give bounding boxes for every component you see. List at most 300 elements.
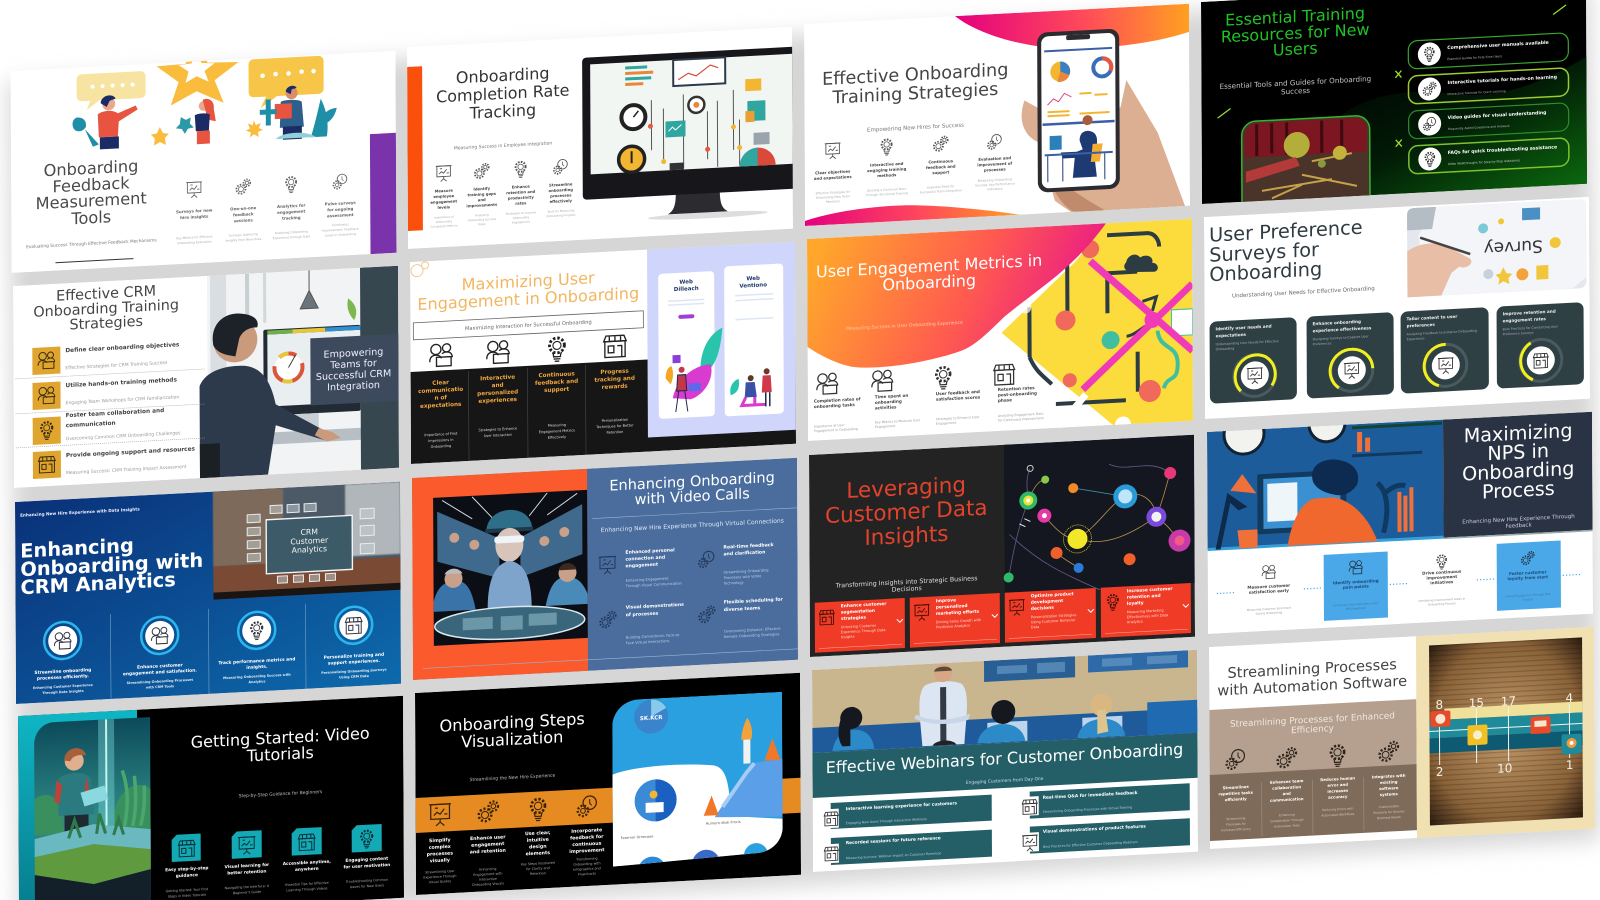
icon row and labels: onboarding (548, 187, 573, 193)
item descriptions: Processes with Video (724, 574, 761, 580)
photo: trainer in a call-centre room (812, 650, 1197, 753)
small kicker line: Enhancing New Hire Experience with Data Insights (20, 506, 140, 518)
icon row and labels: methods (877, 172, 897, 178)
card 2 (1307, 312, 1394, 399)
row texts: Provide ongoing support and resources (66, 446, 196, 459)
descriptions: Engagement (512, 220, 531, 225)
slide 9: Enhancing Onboarding with CRM Analytics (15, 482, 401, 704)
icon row and labels: improvement of (977, 161, 1013, 167)
metric descriptions: Engagement in Onboarding (814, 427, 858, 433)
teal panel (18, 710, 138, 900)
item labels: Enhanced personal (625, 548, 675, 556)
metric labels: User feedback and (936, 389, 980, 396)
metric labels (814, 385, 1037, 414)
card 4: Best Practices for Conducting User (1503, 324, 1558, 331)
slide 12: Maximizing NPS in Onboarding Process (1207, 392, 1593, 634)
slide 13: Getting Started: Video Tutorials (18, 696, 404, 900)
descriptions: Enhancing New Experience with (1333, 601, 1378, 607)
descriptions: Surveys: Gathering (229, 232, 258, 238)
card: manuals (1408, 33, 1568, 69)
heading: Onboarding Training (33, 297, 179, 321)
labels: guidance (176, 872, 198, 879)
item labels (625, 542, 784, 618)
icon row and labels (176, 173, 356, 226)
card 3: Using Customer Behavior (1031, 618, 1076, 624)
timeline numbers: 8 (1435, 698, 1443, 712)
icon row and labels: Identify (473, 186, 490, 192)
heading: Onboarding (44, 156, 138, 180)
column descriptions (33, 668, 387, 696)
descriptions: Insights from New Hires (226, 237, 262, 243)
illustration: desktop monitor with dashboard (582, 47, 798, 225)
icon row and labels: rates (515, 200, 527, 206)
descriptions: Onboarding Progress (546, 213, 576, 218)
descriptions: Essential Skills for (927, 184, 954, 190)
heading: Resources for New (1221, 20, 1370, 46)
row texts: Utilize hands-on training methods (66, 377, 177, 389)
decorative rings (411, 262, 429, 277)
subtitle: Step-by-Step Guidance for Beginners (239, 789, 323, 799)
card: interactive learning: Interactive learning experience for customers (846, 800, 957, 812)
timeline numbers: 1 (1566, 758, 1574, 772)
card 2: personalized (936, 603, 967, 611)
descriptions: Measuring Customer Sentiment (1247, 606, 1291, 612)
descriptions: Using Engagement Through NPS (1505, 592, 1551, 598)
heading: Onboarding (456, 64, 550, 87)
column labels: error and (1327, 782, 1348, 788)
card 4: Measuring Marketing (1127, 608, 1164, 614)
subtitle: Enhancing New Hire Experience Through (1462, 514, 1575, 526)
photo: CRM customer analytics hologram: CRM (300, 527, 318, 537)
item descriptions: Through Visual Communication (625, 581, 682, 588)
icons (1262, 550, 1534, 579)
orange left panel (412, 469, 588, 680)
metric labels: onboarding (875, 399, 902, 405)
item labels: and clarification (723, 549, 765, 557)
column descriptions: Streamlining Onboarding Processes (127, 678, 193, 685)
icon row and labels: and (478, 197, 486, 202)
column labels: Reduces human (1320, 775, 1355, 782)
card 2: Driving Sales Growth with (936, 618, 981, 624)
column descriptions: Through Data Insights (42, 689, 84, 695)
column descriptions: Strategies to Enhance (479, 426, 517, 432)
slide 4: Essential Training Resources for New Users (1201, 0, 1587, 219)
heading: User Preference (1209, 216, 1363, 247)
photo: CRM customer analytics hologram (213, 482, 401, 600)
icon row and labels: productivity (508, 194, 534, 201)
labels: continuous (572, 841, 602, 848)
orange column labels: n of (434, 395, 447, 402)
slide 8: User Preference Surveys for Onboarding (1204, 197, 1590, 419)
column dividers (1262, 777, 1364, 836)
illustration: person at desk with clocks (1207, 400, 1444, 551)
heading: Surveys for (1209, 238, 1319, 267)
subtitle: Engaging Customers from Day One (966, 776, 1044, 786)
subtitle box: Maximizing Interaction for Successful Onboarding (465, 319, 592, 332)
descriptions: Strategies to Improve (506, 210, 536, 216)
black lower band (411, 352, 796, 464)
card 2 (910, 593, 1000, 648)
card 2: Improve (936, 598, 956, 604)
column descriptions: Measuring (548, 423, 566, 428)
descriptions: Onboarding New Team (816, 194, 850, 200)
heading: Streamlining Processes (1227, 656, 1397, 682)
card 4: Analytics (1127, 620, 1143, 624)
heading: Users (1273, 38, 1318, 60)
card: tutorials: Interactive tutorials for hands-on learning (1447, 74, 1557, 86)
line icons (817, 364, 1015, 395)
gradient wave header (807, 223, 1107, 371)
row descriptions: Overcoming Common CRM Onboarding Challenges (66, 430, 181, 442)
subtitle: Streamlining the New Hire Experience (470, 773, 556, 783)
card 4: Effectiveness with Data (1127, 613, 1168, 619)
column labels: repetitive tasks (1218, 790, 1254, 797)
icon row and labels: hire insights (180, 214, 209, 220)
descriptions: Transforming (576, 856, 598, 862)
metric labels: Retention rates (998, 385, 1035, 392)
card: interactive learning: Engaging New Users Through Interactive Webinars (846, 817, 927, 825)
orange column labels: rewards (602, 384, 628, 391)
card 4 (1497, 302, 1584, 389)
card: FAQs: Video Walkthroughs for Step-by-Step Assistance (1448, 158, 1520, 166)
labels: processes (427, 850, 453, 858)
icon tiles (32, 347, 61, 479)
slide 16: Streamlining Processes with Automation Software (1209, 627, 1595, 849)
line icons (430, 334, 626, 368)
labels: visually (430, 857, 450, 864)
descriptions: for Clarity and (526, 866, 550, 871)
column descriptions: Analytics (248, 679, 266, 684)
card 2: Predictive Analytics (936, 624, 970, 629)
orange column labels: Clear (432, 380, 449, 387)
column descriptions: Effectively (548, 435, 566, 440)
heading: Effective CRM (56, 284, 156, 305)
item labels: Real-time feedback (723, 543, 774, 551)
descriptions (430, 208, 576, 229)
row descriptions: Effective Strategies for CRM Training Success (65, 360, 168, 371)
descriptions: Navigating the Interface: A (225, 884, 269, 890)
card 1: segmentation (841, 608, 875, 616)
heading: Tools (70, 207, 111, 228)
column labels: software (1379, 785, 1399, 791)
column descriptions: Impressions in (428, 438, 454, 443)
heading: Customer Data (825, 496, 988, 529)
labels: and retention (470, 848, 506, 856)
labels: elements (526, 850, 550, 857)
icon row and labels: Interactive and (870, 161, 903, 168)
lavender panel with phones: Web (679, 279, 693, 286)
labels: Engaging content (345, 857, 388, 864)
card 1: strategies (841, 615, 866, 622)
heading: with Video Calls (635, 486, 750, 508)
item descriptions: Remote Onboarding Strategies (724, 632, 780, 639)
band icons (429, 796, 596, 826)
card 3: Personalization Strategies (1031, 613, 1076, 619)
column labels: increases (1327, 788, 1349, 794)
callout: Empowering Teams: Successful CRM (316, 368, 391, 383)
icon row and labels: Enhance (512, 184, 530, 190)
card 3: Experience (1407, 336, 1424, 341)
column labels: collaboration (1272, 784, 1301, 791)
beige frame (1416, 627, 1595, 838)
card 1: Onboarding (1216, 346, 1234, 351)
column dividers (111, 604, 306, 699)
metric descriptions: Key Metrics to Measure User (875, 418, 920, 424)
icon row and labels: Evaluation and (978, 155, 1011, 162)
column descriptions: User Interaction (484, 433, 512, 438)
descriptions: Measuring Onboarding (978, 177, 1012, 183)
green gradient background shape (1301, 57, 1587, 199)
card 3: Analyzing Feedback to Enhance Onboarding (1407, 329, 1477, 336)
column descriptions: Importance of First (424, 432, 457, 437)
column labels (1218, 773, 1406, 806)
card 4: loyalty (1127, 600, 1144, 607)
subtitle: Feedback (1505, 522, 1532, 530)
labels: Measure customer (1247, 583, 1290, 590)
icon row and labels: engaging training (867, 166, 907, 173)
metric labels: onboarding tasks (814, 402, 855, 409)
descriptions: Onboarding (436, 219, 452, 224)
column labels: Enhance customer (137, 663, 183, 671)
card: recorded sessions: Measuring Success: Webinar Impact on Customer Retention (846, 851, 941, 860)
column labels: Streamline onboarding (34, 668, 91, 676)
heading: Tutorials (246, 743, 314, 766)
metric labels: post-onboarding (998, 390, 1037, 398)
subtitle box (413, 311, 643, 340)
subtitle: Measuring Success in Employee Integration (454, 140, 552, 152)
card 3: development (1031, 598, 1063, 606)
descriptions: Success: Key Performance (975, 181, 1015, 188)
descriptions: Members (826, 199, 840, 204)
labels (427, 827, 605, 865)
icon row and labels: improvements (466, 202, 498, 208)
icon row and labels: processes (984, 166, 1006, 173)
labels: better retention (227, 869, 266, 877)
descriptions: Continuous (332, 222, 349, 227)
column descriptions: Personalizing Onboarding Journeys (321, 668, 387, 675)
heading: Enhancing Onboarding (609, 470, 775, 495)
descriptions: Beginner's Guide (233, 890, 261, 895)
descriptions: Essential Tips for Effective (285, 881, 329, 887)
metric descriptions: Strategies to Enhance User (936, 415, 979, 421)
icon row and labels: engagement (430, 198, 457, 205)
timeline numbers: 4 (1565, 691, 1573, 705)
item labels: engagement (625, 562, 659, 569)
descriptions: Key Metrics for Effective (176, 234, 213, 240)
row texts: communication (66, 421, 116, 429)
icon row and labels: Clear objectives (815, 169, 850, 175)
column labels: Enhances team (1270, 778, 1303, 785)
column descriptions: Enhancing Customer Experience (33, 683, 93, 690)
descriptions: Analyzing Onboarding (275, 229, 308, 235)
card 1: expectations (1216, 332, 1247, 338)
icon row and labels: retention and (506, 189, 536, 195)
icon row and labels: Streamline (549, 181, 572, 188)
column descriptions: Onboarding (431, 444, 451, 449)
labels: complex (429, 844, 451, 851)
descriptions: Visual Guides (429, 879, 451, 884)
labels: anywhere (295, 866, 319, 873)
icon row and labels: feedback and (926, 164, 956, 170)
column descriptions: Customizable (1379, 804, 1399, 809)
descriptions: Experience Through (423, 874, 456, 880)
item labels: connection and (625, 555, 665, 563)
callout: Empowering Teams: Empowering (323, 347, 383, 361)
labels: pain points (1343, 584, 1369, 590)
descriptions: Through Structured Training (865, 191, 908, 197)
photo: hand writing on survey sheet: Survey (1484, 235, 1543, 258)
heading: with Automation Software (1217, 673, 1407, 700)
descriptions: Importance of (434, 215, 454, 220)
subtitle: Essential Tools and Guides for Onboarding (1220, 74, 1371, 91)
column descriptions: Collaboration Through (1270, 818, 1304, 823)
descriptions: Engagement with (473, 871, 502, 877)
column dividers (469, 365, 586, 461)
heading: Leveraging (846, 473, 966, 504)
descriptions: Onboarding with (573, 861, 601, 867)
heading: Onboarding with (20, 549, 203, 581)
infographic panel with stairs: SK.KCR (640, 715, 663, 722)
orange column labels: and (492, 383, 504, 389)
column labels: Personalize training and (324, 653, 384, 661)
descriptions: During Onboarding (1256, 610, 1282, 616)
descriptions (176, 224, 358, 244)
descriptions: Onboarding Evaluation (177, 239, 212, 245)
icon row and labels: engagement (277, 209, 306, 215)
descriptions: Analyzing (475, 213, 489, 217)
icon row and labels: Pulse surveys (325, 200, 356, 207)
card: visual demonstrations: Best Practices for Effective Customer Onboarding Webinars (1043, 840, 1138, 849)
orange column labels: feedback and (535, 379, 578, 387)
brown column block (1210, 764, 1417, 841)
descriptions: Retention (530, 871, 546, 876)
heading: Essential Training (1225, 3, 1365, 30)
labels: improvement (569, 847, 605, 855)
descriptions: Interactive (479, 877, 497, 882)
subtitle: Evaluating Success Through Effective Feedback Mechanisms (26, 237, 157, 250)
blue highlight boxes (1324, 540, 1561, 621)
timeline numbers: 2 (1436, 765, 1444, 779)
orange column labels: experiences (478, 397, 518, 405)
column labels: Streamlines (1223, 784, 1249, 790)
slide 2: Onboarding Completion Rate Tracking (407, 27, 798, 249)
photo: futuristic video conference (433, 490, 588, 646)
descriptions (1247, 592, 1551, 616)
card 3: Optimize product (1031, 592, 1074, 599)
card 1 (1210, 317, 1297, 404)
descriptions (423, 856, 601, 890)
icon row and labels: feedback (233, 211, 254, 217)
descriptions: Building a Continual Team (867, 187, 906, 193)
lavender panel with phones: Ventiono (739, 282, 767, 290)
descriptions: Onboarding Visuals (472, 881, 504, 887)
card 4: Improve retention and (1503, 309, 1556, 316)
column descriptions: Increased Efficiency (1221, 827, 1251, 832)
descriptions: Onboarding Process (1428, 601, 1456, 607)
row texts (65, 341, 196, 459)
transit-map illustration on yellow diamonds (1001, 219, 1193, 439)
metric labels: activities (875, 404, 897, 410)
labels: initiatives (1430, 579, 1454, 585)
column descriptions: Automated Workflows (1321, 812, 1355, 818)
card: video guides: Video guides for visual understanding (1448, 110, 1546, 121)
teal icon tiles (172, 824, 382, 862)
orange column labels: communicatio (418, 387, 463, 395)
heading: Process (1482, 477, 1555, 504)
labels: for user motivation (343, 862, 390, 870)
orange side bar (407, 66, 423, 231)
orange column labels: Continuous (538, 371, 575, 379)
heading: Maximizing User (462, 268, 595, 294)
subtitle: Efficiency (1291, 724, 1334, 736)
subtitle: Decisions (892, 585, 922, 594)
card: visual demonstrations (1021, 818, 1190, 854)
row texts: Foster team collaboration and (66, 408, 164, 419)
descriptions: Identifying Improvement Areas in (1418, 596, 1465, 603)
heading: Insights (864, 522, 948, 551)
card 3 (1005, 588, 1096, 643)
item descriptions: Technology (723, 581, 745, 586)
rule lines (422, 508, 798, 668)
card: video guides (1409, 103, 1569, 139)
icon row and labels (814, 133, 1013, 182)
card 3: preferences (1407, 322, 1435, 328)
descriptions: Effective Strategies for (816, 190, 850, 195)
dark title panel (1443, 412, 1593, 538)
metric descriptions: Importance of User (814, 423, 845, 429)
card 4: Increase customer (1127, 587, 1173, 594)
column descriptions: with CRM Tools (146, 684, 174, 690)
card 2: experience effectiveness (1313, 325, 1372, 333)
descriptions: Learning Through Videos (286, 886, 328, 892)
infographic panel with stairs: Humeric:thok Fmcis (706, 820, 741, 826)
dotted connectors (1217, 574, 1581, 594)
labels: intuitive (527, 837, 549, 844)
column labels: insights. (246, 664, 268, 671)
icon row and labels: assessment (327, 212, 354, 218)
icon row and labels: tracking (282, 215, 301, 221)
descriptions: Loops in Onboarding (325, 232, 356, 238)
heading: Feedback (52, 173, 130, 196)
column descriptions (424, 417, 634, 449)
heading: CRM Analytics (20, 568, 176, 599)
title band (812, 733, 1198, 798)
column labels: accuracy (1328, 794, 1348, 800)
slide 15: Effective Webinars for Customer Onboarding (812, 650, 1198, 872)
labels: Visual learning for (224, 863, 269, 870)
item descriptions: Overcoming Distance: Effective (724, 627, 781, 634)
card 4: Preference Surveys (1503, 331, 1534, 336)
item icons (599, 551, 715, 628)
orange column labels: Progress (600, 369, 629, 376)
item descriptions: Streamlining Onboarding (724, 568, 769, 575)
column labels: efficiently (1225, 796, 1247, 802)
item descriptions (625, 568, 781, 645)
icon row and labels: and expectations (814, 174, 852, 181)
card 3: Tailor content to user (1407, 314, 1457, 321)
card: FAQs (1409, 138, 1569, 174)
heading: Getting Started: Video (191, 724, 370, 752)
office photo with man at monitor (199, 268, 364, 478)
slide 11: Leveraging Customer Data Insights (809, 435, 1195, 657)
card 2: Enhance onboarding (1313, 319, 1361, 326)
slide 1: Onboarding Feedback Measurement Tools (10, 51, 396, 273)
row texts: Define clear onboarding objectives (65, 342, 180, 354)
card 3 (1401, 307, 1489, 394)
descriptions: Experience through Data (273, 234, 310, 240)
card: interactive learning (823, 795, 992, 829)
timeline numbers: 15 (1469, 696, 1484, 710)
